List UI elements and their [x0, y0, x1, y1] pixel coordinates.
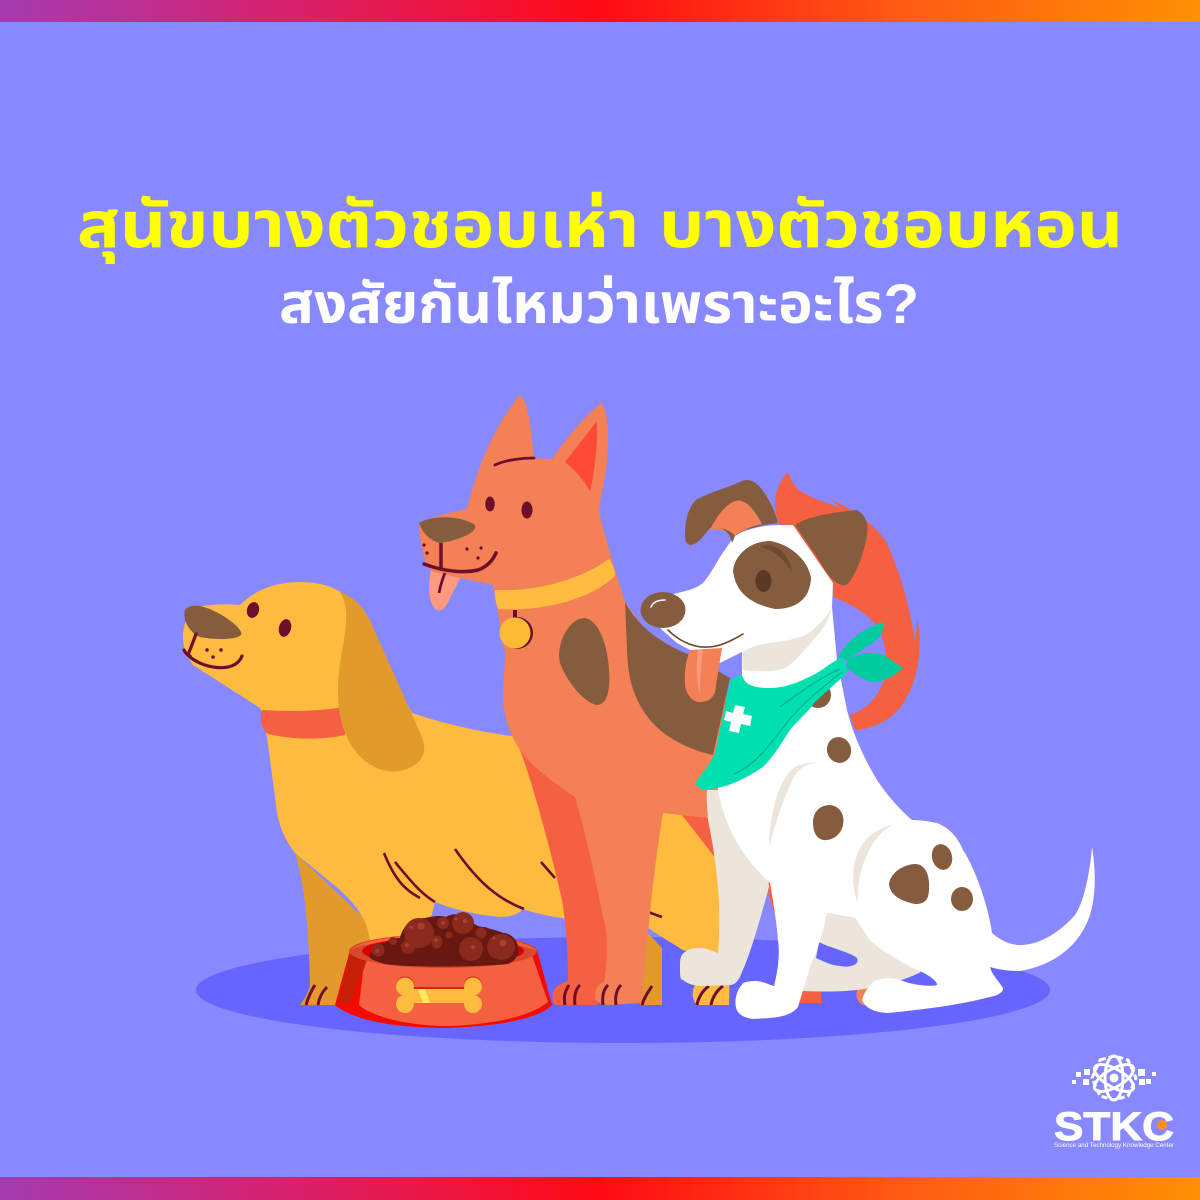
- white dog spots: [805, 682, 973, 911]
- bandana knot: [838, 622, 903, 682]
- title: สุนัขบางตัวชอบเห่า บางตัวชอบหอน: [77, 188, 1123, 264]
- STKC logo: [1054, 1056, 1174, 1149]
- logo orange dot: [1157, 1120, 1167, 1130]
- white dog mouth: [668, 630, 743, 647]
- white dog body shade lines: [742, 605, 893, 903]
- bottom gradient bar: [0, 1177, 1200, 1200]
- logo tagline: Science and Technology Knowledge Center: [1054, 1143, 1174, 1149]
- bone emblem: [396, 976, 482, 1013]
- white dog: [640, 480, 1095, 1019]
- orange dog hind leg: sliver behind white leg: [766, 878, 782, 920]
- orange dog hind paw: [856, 985, 880, 1005]
- kibble highlights: [375, 918, 506, 953]
- kibble: [372, 912, 515, 961]
- logo atom icon: [1090, 1056, 1138, 1100]
- yellow dog: [183, 582, 730, 1005]
- bowl shaded side: [338, 952, 367, 1003]
- orange dog tag: [500, 610, 533, 649]
- orange dog inner ear: [565, 421, 597, 491]
- food pile: [369, 914, 518, 967]
- yellow dog collar: [261, 707, 345, 739]
- paw claws: [306, 985, 723, 1005]
- tongue of orange dog: [429, 570, 462, 610]
- bandana cross: [724, 705, 752, 733]
- bowl rim: [349, 934, 537, 968]
- white dog tongue: [685, 648, 722, 702]
- yellow dog nose: [184, 606, 241, 639]
- yellow dog fur lines: [384, 849, 662, 917]
- yellow dog body: [183, 582, 725, 960]
- white dog blue gap in hind leg: [816, 942, 858, 967]
- bone red edge: [396, 976, 482, 994]
- white dog body and head: [650, 525, 1095, 1019]
- bowl base: [335, 950, 552, 1028]
- inner ear fold: [714, 528, 735, 543]
- white dog brow: [760, 545, 792, 573]
- logo wordmark: STKC: [1054, 1105, 1174, 1149]
- orange dog face details: [422, 458, 534, 593]
- bandana fold lines: [734, 669, 842, 774]
- orange dog hind leg: upper part: [682, 815, 720, 864]
- yellow dog far hind leg: [640, 925, 662, 1005]
- orange dog body and head: [419, 395, 730, 1005]
- white dog nose: [640, 592, 686, 628]
- white dog inner ear: [710, 501, 762, 537]
- white dog eye patch: [733, 541, 811, 609]
- bowl body: [359, 955, 548, 1026]
- white dog left ear: [685, 480, 778, 545]
- yellow dog front far leg: [295, 853, 375, 1005]
- orange dog chest spot: [559, 618, 609, 705]
- nose highlight: [651, 600, 665, 607]
- bandana: [696, 657, 847, 789]
- ground shadow: [196, 937, 1050, 1043]
- bowl inner: [362, 937, 524, 965]
- orange dog: [306, 395, 880, 1005]
- yellow dog hind paw: [693, 960, 730, 1005]
- top gradient bar: [0, 0, 1200, 22]
- orange dog collar: [495, 559, 615, 609]
- white dog eye: [756, 570, 772, 592]
- orange dog nose: [419, 517, 475, 543]
- yellow dog face details: [184, 601, 293, 668]
- orange dog near leg shadow side: [520, 750, 610, 1005]
- food bowl: [335, 912, 552, 1028]
- subtitle: สงสัยกันไหมว่าเพราะอะไร?: [279, 272, 919, 335]
- white dog right ear: [795, 510, 868, 585]
- orange dog tail: [775, 472, 920, 730]
- logo pixel squares: [1072, 1069, 1156, 1085]
- yellow dog ear: [338, 592, 424, 771]
- orange dog hind leg: lower part: [790, 945, 822, 1003]
- orange dog saddle patch: [625, 602, 730, 755]
- white dog cream far legs: [680, 790, 921, 992]
